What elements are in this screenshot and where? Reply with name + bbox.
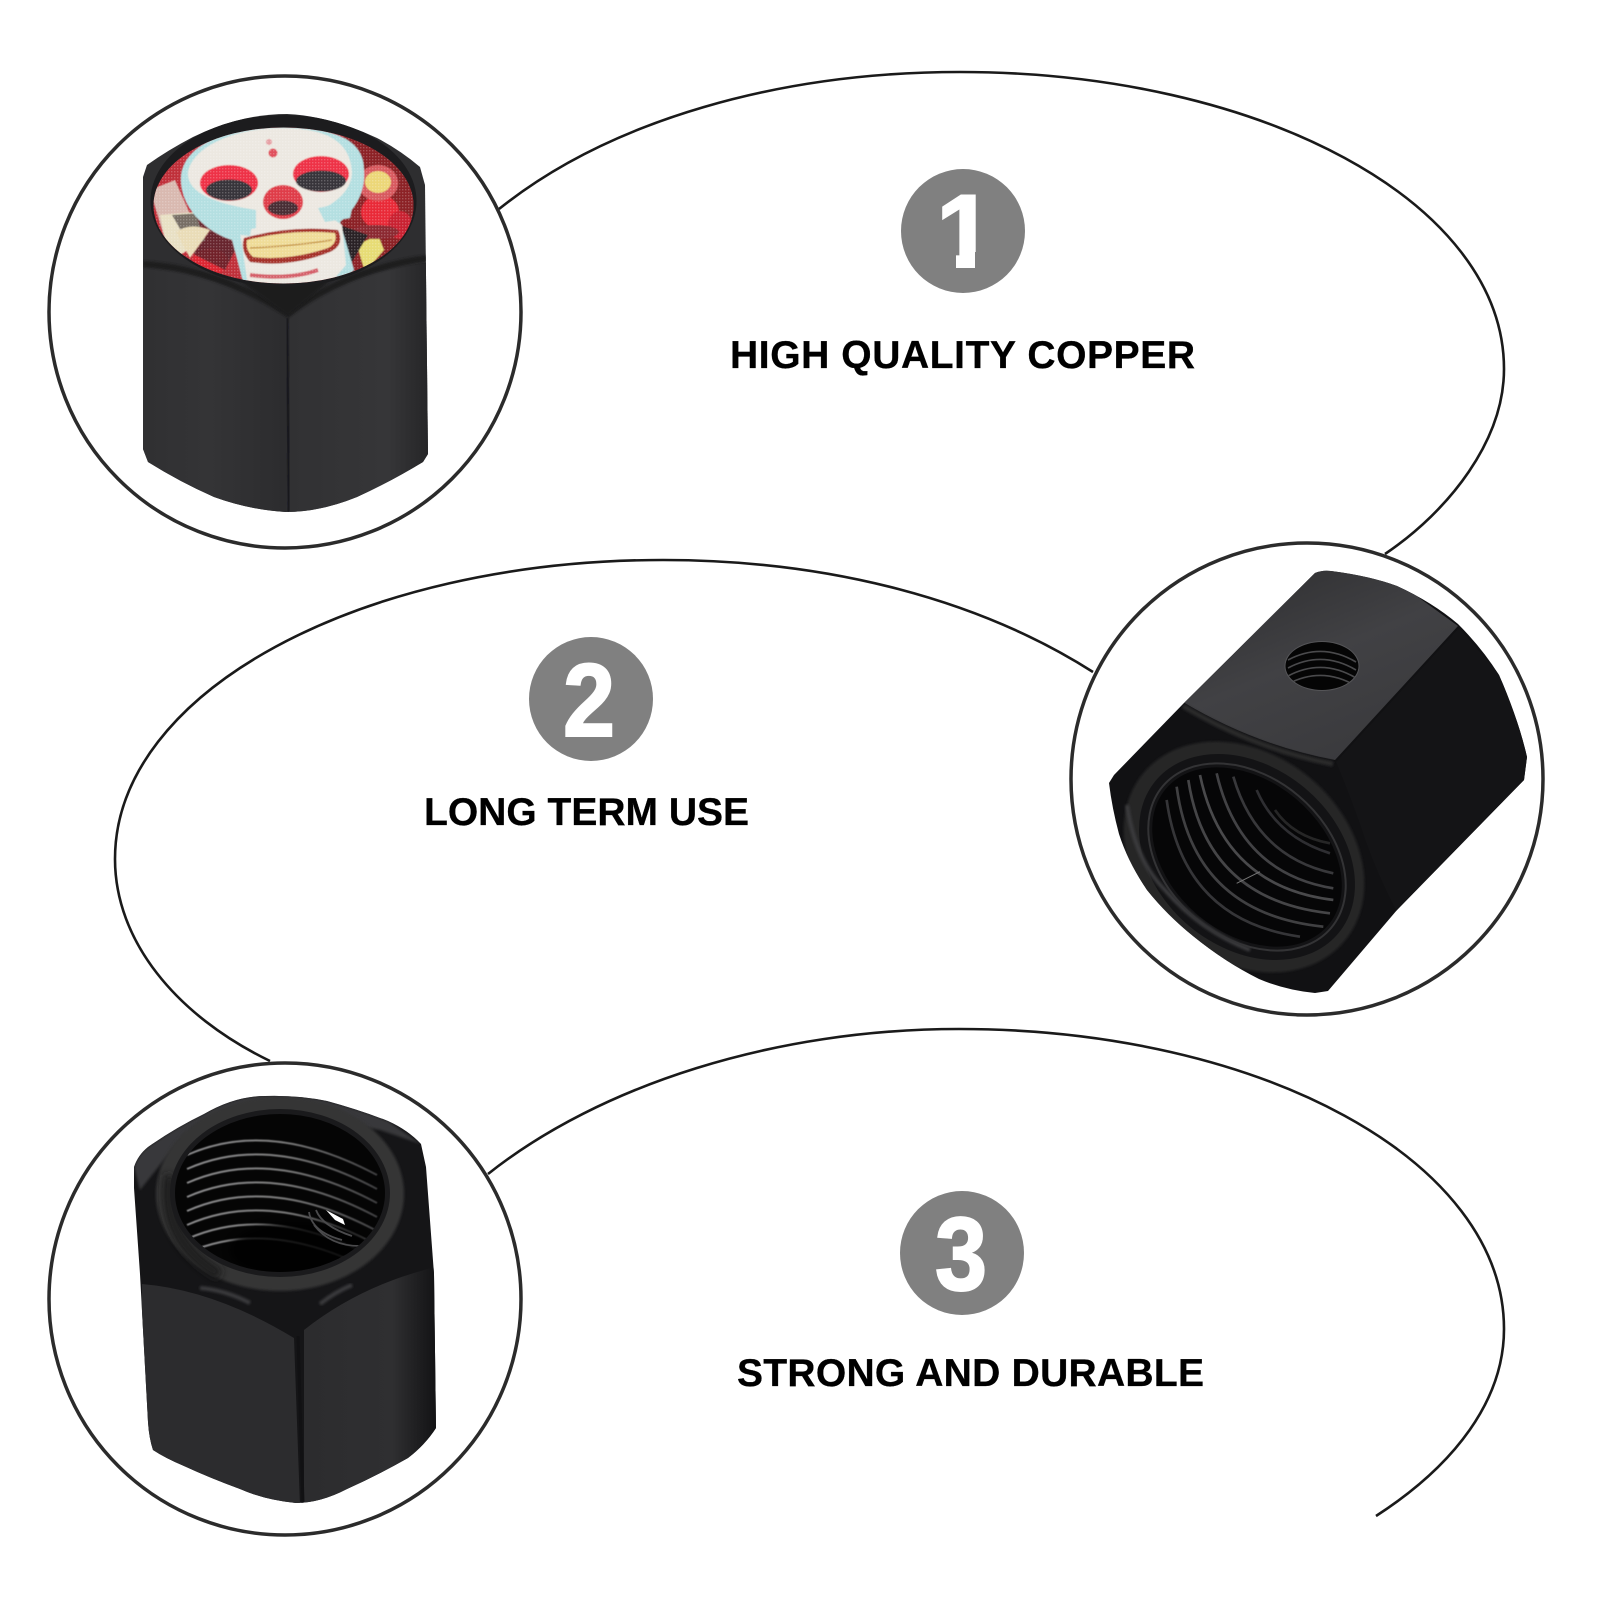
heading: strong and durable: STRONG AND DURABLE — [737, 1352, 1204, 1395]
icon: top face with small hole — [1183, 568, 1458, 760]
heading: high quality copper: HIGH QUALITY COPPER — [730, 334, 1195, 377]
panel: open-end cap product photo — [49, 1063, 521, 1535]
icon: right face — [1396, 670, 1527, 911]
number badge 3 — [900, 1191, 1024, 1315]
number badge 2 — [529, 637, 653, 761]
icon: hex cap body angled — [1109, 570, 1527, 993]
icon: skull emblem — [150, 125, 420, 290]
number badge 2: 2 — [563, 641, 615, 758]
number badge 1: 1 — [936, 174, 994, 290]
icon: thread bore — [175, 1114, 385, 1272]
icon: main thread bore — [1152, 768, 1342, 946]
icon: side hole — [1284, 641, 1360, 691]
number badge 3: 3 — [935, 1195, 987, 1312]
panel: skull valve cap product photo — [49, 76, 521, 548]
icon: hex cap body upright — [125, 1090, 445, 1510]
icon: hex cap body — [143, 114, 428, 512]
callout outline 2 — [115, 560, 1093, 1061]
panel: threaded cap with side hole product photo — [1071, 543, 1543, 1020]
heading: long term use: LONG TERM USE — [424, 791, 749, 834]
number badge 1 — [901, 169, 1025, 293]
callout outline 3 — [488, 1029, 1504, 1516]
callout outline 1 — [499, 72, 1504, 554]
